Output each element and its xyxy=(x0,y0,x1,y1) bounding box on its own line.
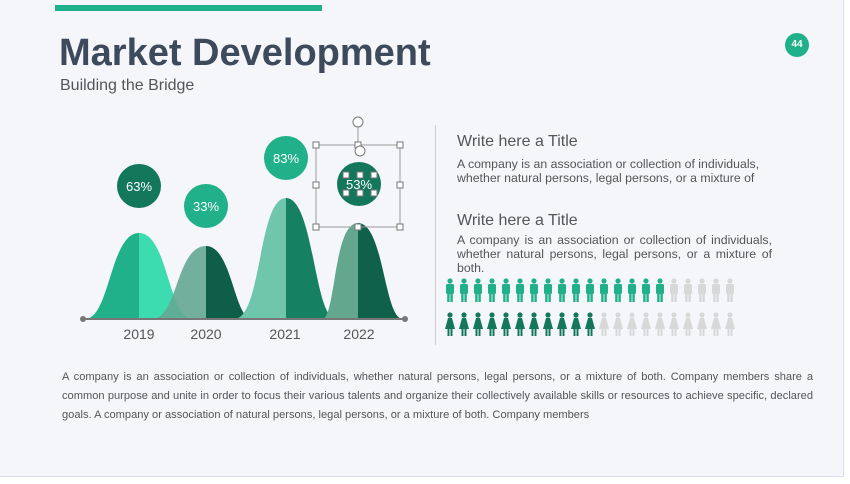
text block 2: A company is an association or collection of individuals, whether natural persons, legal persons, or a mixture of both. xyxy=(457,233,772,275)
text block 1: Write here a Title xyxy=(457,133,578,150)
bubble 33%: 33% xyxy=(193,199,219,214)
subtitle: Building the Bridge xyxy=(60,77,194,94)
text block 2: Write here a Title xyxy=(457,212,578,229)
bubble 53% with selection: 53% xyxy=(346,177,372,192)
bubble 33% xyxy=(184,184,228,228)
year labels: 2022 xyxy=(343,326,375,342)
page badge: 44 xyxy=(791,39,803,50)
top accent bar xyxy=(55,5,322,11)
page badge xyxy=(785,33,809,57)
hill 2021 xyxy=(234,198,336,319)
women row xyxy=(445,312,735,336)
hill 2022 xyxy=(322,223,403,319)
year labels: 2021 xyxy=(269,326,301,342)
year labels xyxy=(123,326,375,342)
title: Market Development xyxy=(59,32,431,74)
bubble 53% with selection xyxy=(313,117,403,230)
year labels: 2020 xyxy=(190,326,222,342)
bubble 83%: 83% xyxy=(273,151,299,166)
text block 1 xyxy=(457,133,759,185)
axis xyxy=(80,316,408,322)
bottom paragraph: A company is an association or collection of individuals, whether natural persons, legal persons, or a mixture of both. Company members share a common purpose and unite in order to focus their various talents and organize their collectively available skills or resources to achieve specific, declared goals. A company or association of natural persons, legal persons, or a mixture of both. Company members xyxy=(62,371,813,421)
hill 2020 xyxy=(152,246,252,319)
men row xyxy=(446,278,734,302)
text block 2 xyxy=(457,212,772,275)
year labels: 2019 xyxy=(123,326,155,342)
text block 1: A company is an association or collection of individuals, whether natural persons, legal persons, or a mixture of xyxy=(457,157,759,185)
chart: hills xyxy=(80,116,408,342)
bubble 63% xyxy=(117,164,161,208)
people icons xyxy=(445,278,735,336)
hill 2019 xyxy=(85,233,193,319)
bubble 63%: 63% xyxy=(126,179,152,194)
bubble 83% xyxy=(264,136,308,180)
divider xyxy=(435,125,436,345)
